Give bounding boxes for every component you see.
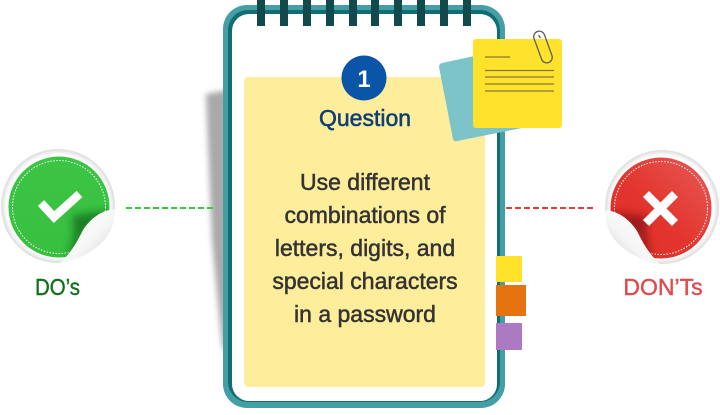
check mark [41,194,80,217]
curl page [605,210,660,264]
label: DON'Ts: DON’Ts [623,274,703,300]
connector: red dashed [506,207,596,209]
yellow note [473,39,562,128]
number badge [342,56,386,100]
question text: in a password [294,301,436,327]
sticker cut-away [598,210,660,271]
note lines [485,57,554,91]
label: DO's: DO’s [35,274,80,300]
cross mark [646,194,675,223]
sticky notes [439,30,562,141]
connector: green dashed [126,207,215,209]
number badge: 1 [357,66,371,93]
heading: Question: Question [319,105,411,131]
sticker cut-away [60,209,122,270]
icon: DO sticker [1,149,115,263]
spiral rings [257,0,471,26]
question text: Use different [300,169,431,195]
question text: special characters [272,268,458,294]
teal note [439,44,552,141]
curl shadow [608,212,654,261]
question text [272,169,458,327]
paperclip [532,30,554,64]
curl page [60,209,115,263]
curl shadow [66,211,112,260]
question text: letters, digits, and [275,235,455,261]
question text: combinations of [284,202,446,228]
notebook shadow [206,90,228,356]
notebook [223,0,505,408]
icon: DON'T sticker [605,150,719,264]
question panel [244,77,485,387]
index tabs [496,256,526,350]
